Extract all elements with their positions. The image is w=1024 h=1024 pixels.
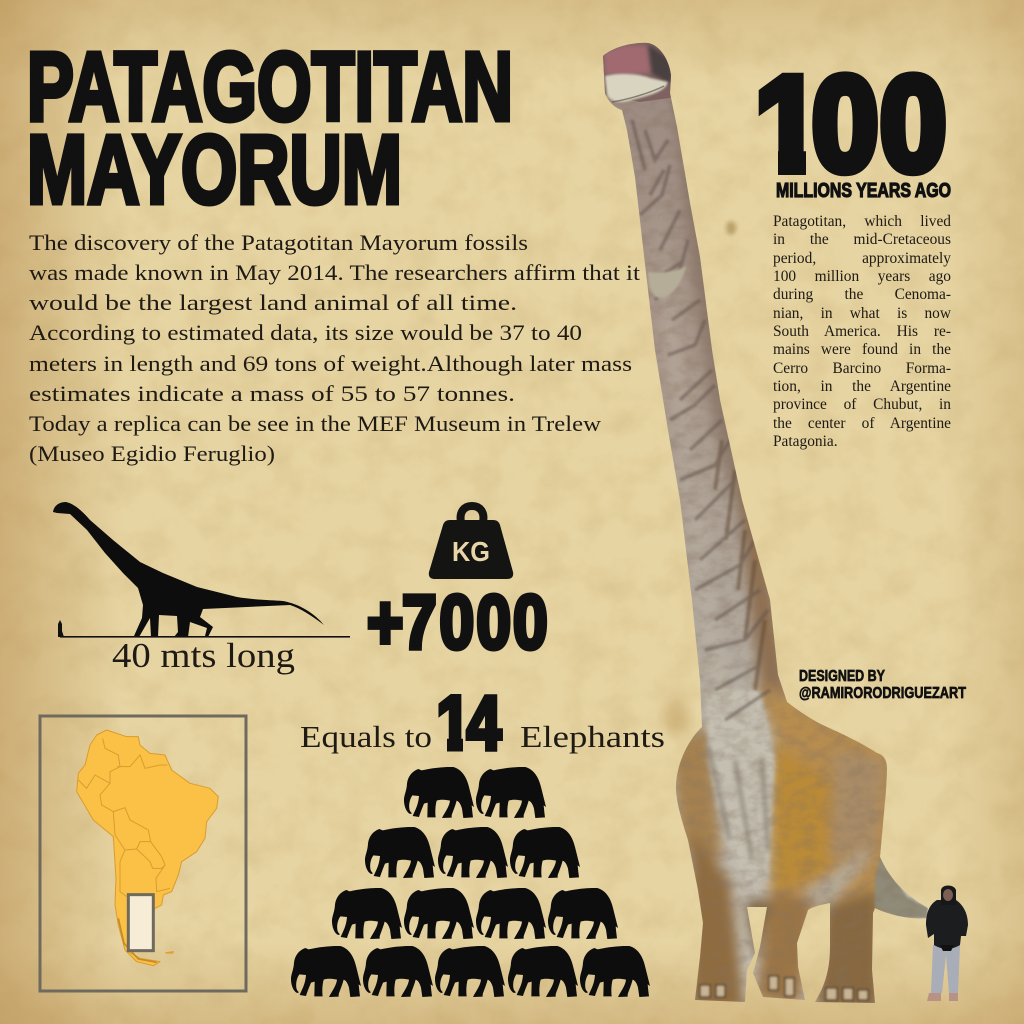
heading: equals to 14 elephants: Equals to [300, 719, 432, 754]
neck stripes [632, 120, 770, 720]
designer credit [799, 668, 966, 702]
icon: dinosaur silhouette with scale line [53, 502, 350, 638]
heading: equals to 14 elephants: 4 [467, 680, 502, 765]
designer credit: DESIGNED BY [799, 668, 886, 685]
hide mottling [622, 102, 914, 1002]
side text block: Patagonia. [773, 433, 838, 450]
big number: 100: 00 [812, 49, 946, 199]
side text block: mains were found in the [773, 341, 951, 358]
big number: 100 [758, 71, 946, 176]
map: South America locator [40, 716, 246, 991]
title [27, 32, 513, 224]
elephant pyramid [291, 767, 650, 997]
intro text block: meters in length and 69 tons of weight.Although later mass [29, 351, 632, 376]
designer credit: @RAMIRORODRIGUEZART [799, 685, 966, 702]
icon: kg weight [429, 506, 513, 579]
chest: pale grey folds [706, 690, 775, 880]
intro text block: (Museo Egidio Feruglio) [29, 441, 275, 466]
intro text block: The discovery of the Patagotitan Mayorum fossils [29, 230, 528, 255]
body: tan and orange hide [670, 685, 900, 1010]
heading: equals to 14 elephants: Elephants [520, 719, 665, 754]
side text block [773, 213, 951, 450]
side text block: the center of Argentine [773, 415, 951, 432]
intro text block: would be the largest land animal of all time. [29, 290, 517, 315]
icon: kg weight: KG [452, 536, 490, 567]
side text block: period, approximately [773, 250, 951, 267]
dinosaur body and neck [600, 40, 930, 1010]
side text block: Cerro Barcino Forma- [773, 360, 951, 377]
subheading: millions years ago: MILLIONS YEARS AGO [776, 180, 951, 202]
side text block: province of Chubut, in [773, 396, 951, 413]
heading: equals to 14 elephants [301, 694, 664, 754]
illustration: patagotitan dinosaur with human for scale [600, 40, 968, 1010]
big number: 100: 1 [755, 49, 821, 199]
heading: equals to 14 elephants: 1 [436, 680, 471, 765]
side text block: nian, in what is now [773, 305, 951, 322]
tail [875, 857, 928, 918]
title: PATAGOTITAN [27, 32, 513, 141]
stat: +7000: +7000 [367, 580, 548, 665]
head [603, 42, 671, 104]
intro text block [29, 230, 641, 466]
intro text block: Today a replica can be see in the MEF Museum in Trelew [29, 411, 602, 436]
side text block: Patagotitan, which lived [773, 213, 951, 230]
feet and toes [700, 976, 868, 1000]
side text block: in the mid-Cretaceous [773, 231, 951, 248]
neck collar patch [648, 266, 686, 298]
side text block: during the Cenoma- [773, 286, 951, 303]
label: 40 mts long: 40 mts long [112, 636, 295, 675]
title: MAYORUM [27, 115, 402, 224]
intro text block: was made known in May 2014. The researchers affirm that it [29, 260, 641, 285]
side text block: 100 million years ago [773, 268, 951, 285]
side text block: tion, in the Argentine [773, 378, 951, 395]
intro text block: According to estimated data, its size would be 37 to 40 [29, 320, 582, 345]
intro text block: estimates indicate a mass of 55 to 57 tonnes. [29, 381, 515, 406]
human figure for scale [926, 886, 968, 1001]
side text block: South America. His re- [773, 323, 951, 340]
